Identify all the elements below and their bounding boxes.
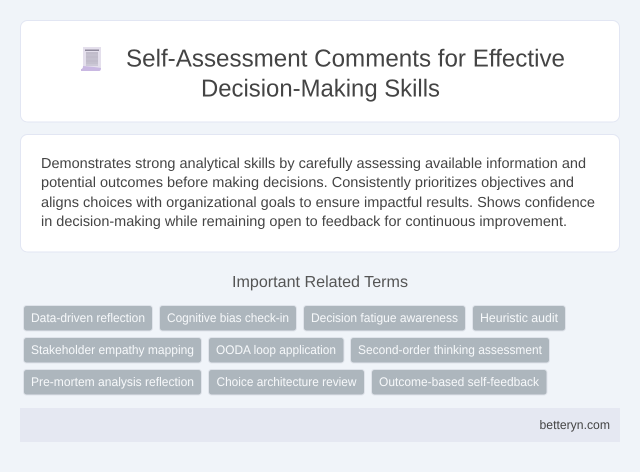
panel: summary text: Demonstrates strong analytical skills by carefully assessing available information and [41,156,586,172]
title: Decision-Making Skills [201,76,440,102]
tag: Heuristic audit [480,311,559,325]
heading: related terms: Important Related Terms [232,274,408,291]
tag [304,306,466,331]
panel: summary text [20,134,620,252]
panel: summary text: aligns choices with organizational goals to ensure impactful results. Shows confidence [41,195,595,211]
tag [472,306,566,331]
footer bar [20,408,620,442]
tag: Second-order thinking assessment [358,343,542,357]
footer bar: betteryn.com [540,418,610,432]
panel: title card [20,20,620,122]
tag: OODA loop application [216,343,336,357]
tag [372,370,547,395]
tag: Cognitive bias check-in [167,311,289,325]
title [126,46,565,102]
tag [208,338,344,363]
tag [24,338,202,363]
tag [208,370,364,395]
tag [24,306,152,331]
panel: summary text: potential outcomes before making decisions. Consistently prioritizes objectives and [41,175,574,191]
tag: Choice architecture review [216,375,357,389]
tag [24,370,202,395]
icon: document scroll [81,47,101,71]
tag: Data-driven reflection [31,311,145,325]
tag list [24,306,566,395]
title: Self-Assessment Comments for Effective [126,46,565,72]
tag: Outcome-based self-feedback [379,375,540,389]
tag [160,306,296,331]
tag [350,338,550,363]
tag: Pre-mortem analysis reflection [31,375,194,389]
panel: summary text: in decision-making while remaining open to feedback for continuous improvement. [41,214,567,230]
tag: Decision fatigue awareness [311,311,458,325]
tag: Stakeholder empathy mapping [31,343,194,357]
